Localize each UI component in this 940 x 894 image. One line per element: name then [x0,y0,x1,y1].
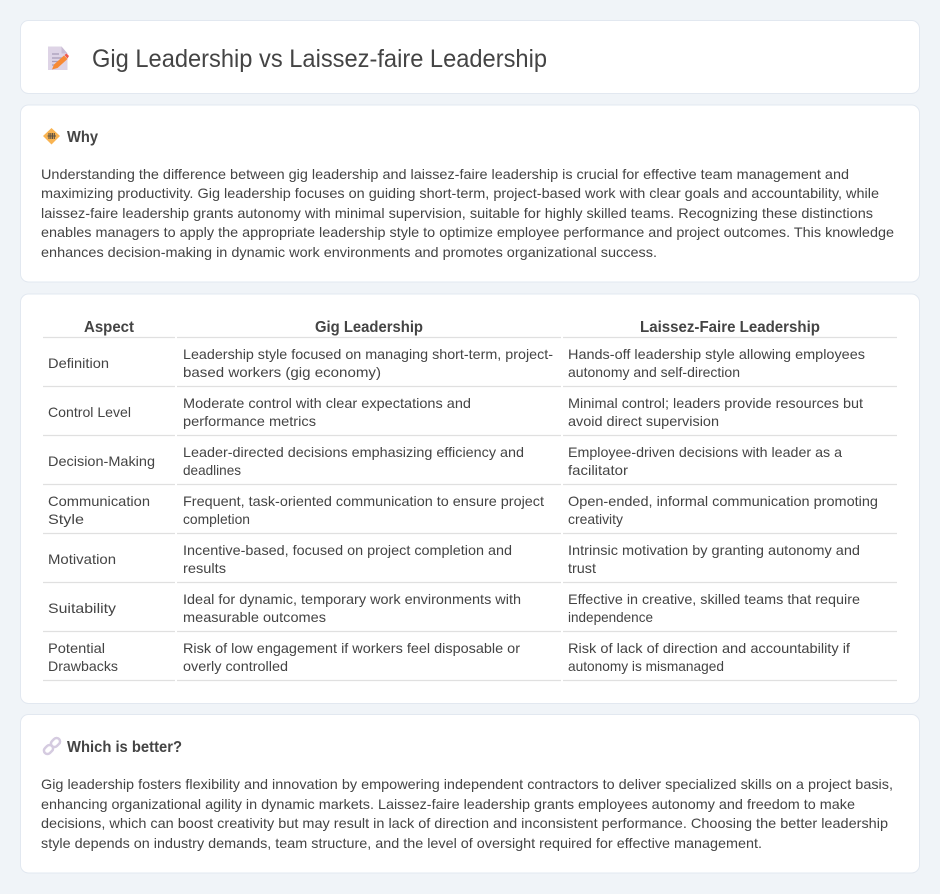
row: motivation: trust [568,560,596,576]
heading: why: Why [67,129,98,146]
text block: which paragraph: style depends on industry demands, team structure, and the level of oversight required for effective management. [41,835,762,851]
row: control level: Moderate control with clear expectations and [183,395,471,411]
icon: chain link [42,736,62,756]
row: suitability: Suitability [48,600,116,616]
text block: why paragraph: laissez-faire leadership grants autonomy with minimal supervision, suitable for highly skilled teams. Recognizing these distinctions [41,205,873,221]
text block: why paragraph: enhances decision-making in dynamic work environments and promotes organizational success. [41,244,657,260]
text block: which paragraph: decisions, which can boost creativity but may result in lack of direction and inconsistent performance. Choosing the better leadership [41,815,888,831]
row: suitability: Ideal for dynamic, temporary work environments with [183,591,521,607]
row: definition: autonomy and self-direction [568,364,740,380]
row: decision-making: Leader-directed decisions emphasizing efficiency and [183,444,524,460]
row: suitability [48,591,860,625]
row: motivation: Motivation [48,551,116,567]
table header: Laissez-Faire Leadership [640,319,820,336]
row: communication style: Style [48,511,84,527]
row: communication style: Open-ended, informal communication promoting [568,493,878,509]
row: potential drawbacks: Risk of low engagement if workers feel disposable or [183,640,520,656]
row: suitability: Effective in creative, skilled teams that require [568,591,860,607]
table header: Aspect [84,319,135,336]
row: communication style [48,493,878,527]
row: control level: Minimal control; leaders provide resources but [568,395,863,411]
row: definition: Definition [48,355,109,371]
row: suitability: measurable outcomes [183,609,326,625]
row: definition [48,346,865,380]
row: potential drawbacks: overly controlled [183,658,288,674]
row: potential drawbacks: Risk of lack of direction and accountability if [568,640,850,656]
row: motivation: Incentive-based, focused on project completion and [183,542,512,558]
row: potential drawbacks: Drawbacks [48,658,118,674]
row: motivation: results [183,560,226,576]
row: definition: Hands-off leadership style allowing employees [568,346,865,362]
title text: Gig Leadership vs Laissez-faire Leadership [92,45,547,73]
icon: document with pencil [48,46,69,70]
row: control level: avoid direct supervision [568,413,719,429]
heading: which is better: Which is better? [67,739,182,756]
text block: why paragraph: maximizing productivity. Gig leadership focuses on guiding short-term, project-based work with clear goals and accountability, while [41,185,879,201]
row: definition: Leadership style focused on managing short-term, project- [183,346,553,362]
row: decision-making: facilitator [568,462,628,478]
row: motivation [48,542,860,576]
panel: which is better [20,714,920,873]
text block: which paragraph: Gig leadership fosters flexibility and innovation by empowering independent contractors to deliver specialized skills on a project basis, [41,776,893,792]
text block: why paragraph: enables managers to apply the appropriate leadership style to optimize employee performance and project outcomes. This knowledge [41,224,894,240]
row: suitability: independence [568,609,653,625]
row: communication style: completion [183,511,250,527]
row: decision-making [48,444,842,478]
row: decision-making: Employee-driven decisions with leader as a [568,444,842,460]
text block: which paragraph: enhancing organizational agility in dynamic markets. Laissez-faire leadership grants employees autonomy and freedom to make [41,796,855,812]
row: control level [48,395,863,429]
row: motivation: Intrinsic motivation by granting autonomy and [568,542,860,558]
text block: why paragraph [41,166,894,260]
panel: why [20,105,920,282]
row: communication style: creativity [568,511,623,527]
row: decision-making: deadlines [183,462,241,478]
row: control level: Control Level [48,404,131,420]
row: definition: based workers (gig economy) [183,364,381,380]
text block: why paragraph: Understanding the difference between gig leadership and laissez-faire leadership is crucial for effective team management and [41,166,849,182]
row: control level: performance metrics [183,413,316,429]
row: communication style: Frequent, task-oriented communication to ensure project [183,493,544,509]
table header: Gig Leadership [315,319,423,336]
panel: title [20,20,920,94]
row: potential drawbacks [48,640,850,674]
icon: warning diamond [43,128,60,144]
row: decision-making: Decision-Making [48,453,155,469]
row: potential drawbacks: autonomy is mismanaged [568,658,724,674]
table header [84,319,820,336]
row: potential drawbacks: Potential [48,640,105,656]
row: communication style: Communication [48,493,150,509]
text block: which paragraph [41,776,893,851]
panel: comparison table [20,294,920,704]
